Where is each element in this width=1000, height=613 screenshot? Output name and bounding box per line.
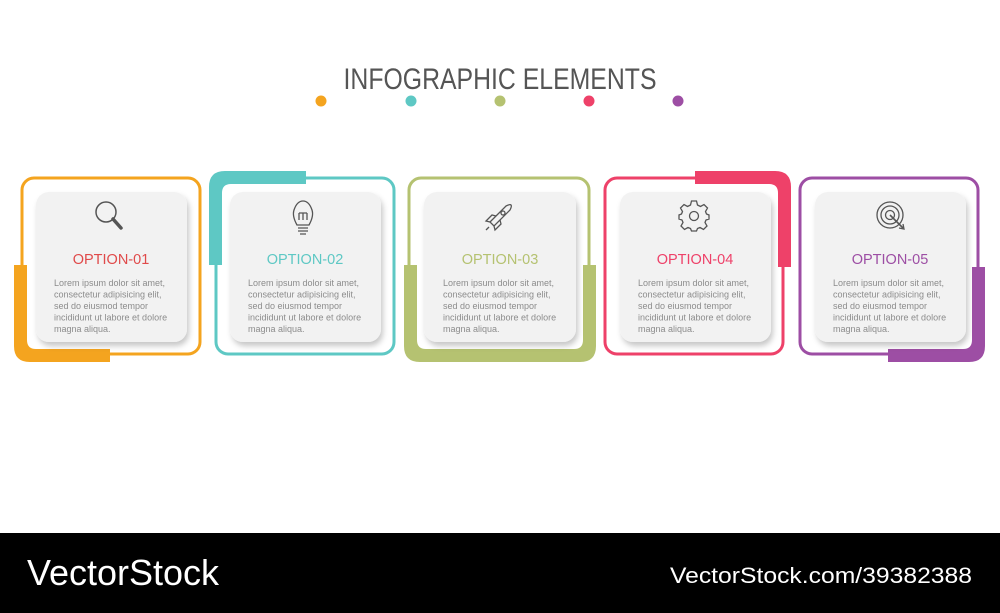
panel: option 3: consectetur adipisicing elit,	[443, 290, 551, 300]
panel: option 2: sed do eiusmod tempor	[248, 301, 342, 311]
panel: option 3: sed do eiusmod tempor	[443, 301, 537, 311]
panel: option 1	[14, 178, 200, 362]
panel: option 5: sed do eiusmod tempor	[833, 301, 927, 311]
icon: gear	[679, 201, 709, 231]
panel: option 3: magna aliqua.	[443, 324, 500, 334]
icon: bulb	[293, 201, 313, 234]
panel: option 1: Lorem ipsum dolor sit amet,	[54, 278, 165, 288]
panel: option 5: incididunt ut labore et dolore	[833, 312, 946, 322]
panel: option 1: incididunt ut labore et dolore	[54, 312, 167, 322]
panel: option 5	[800, 178, 985, 362]
panel: option 2: Lorem ipsum dolor sit amet,	[248, 278, 359, 288]
panel: option 4: OPTION-04	[657, 252, 733, 268]
panel: option 2: incididunt ut labore et dolore	[248, 312, 361, 322]
panel: option 5: OPTION-05	[852, 252, 928, 268]
dots	[316, 96, 684, 106]
panel: option 3: incididunt ut labore et dolore	[443, 312, 556, 322]
icon: rocket	[486, 205, 511, 230]
panel: option 5: magna aliqua.	[833, 324, 890, 334]
footer: VectorStock	[27, 552, 220, 593]
panel: option 3: OPTION-03	[462, 252, 538, 268]
panel: option 2	[209, 171, 394, 354]
title: INFOGRAPHIC ELEMENTS	[344, 63, 656, 96]
panel: option 4: incididunt ut labore et dolore	[638, 312, 751, 322]
panel: option 4: magna aliqua.	[638, 324, 695, 334]
panel: option 4: consectetur adipisicing elit,	[638, 290, 746, 300]
footer: VectorStock.com/39382388	[670, 563, 972, 588]
panel: option 1: magna aliqua.	[54, 324, 111, 334]
icon: target	[877, 202, 904, 229]
panel: option 1: sed do eiusmod tempor	[54, 301, 148, 311]
panel: option 4: sed do eiusmod tempor	[638, 301, 732, 311]
footer	[0, 533, 1000, 613]
panel: option 3: Lorem ipsum dolor sit amet,	[443, 278, 554, 288]
panel: option 2: OPTION-02	[267, 252, 343, 268]
icon: magnifier	[96, 202, 121, 228]
panel: option 2: magna aliqua.	[248, 324, 305, 334]
panel: option 4	[605, 171, 791, 354]
panel: option 2: consectetur adipisicing elit,	[248, 290, 356, 300]
panel: option 5: consectetur adipisicing elit,	[833, 290, 941, 300]
panel: option 3	[404, 178, 596, 362]
panel: option 1: consectetur adipisicing elit,	[54, 290, 162, 300]
panel: option 1: OPTION-01	[73, 252, 149, 268]
panel: option 4: Lorem ipsum dolor sit amet,	[638, 278, 749, 288]
panel: option 5: Lorem ipsum dolor sit amet,	[833, 278, 944, 288]
